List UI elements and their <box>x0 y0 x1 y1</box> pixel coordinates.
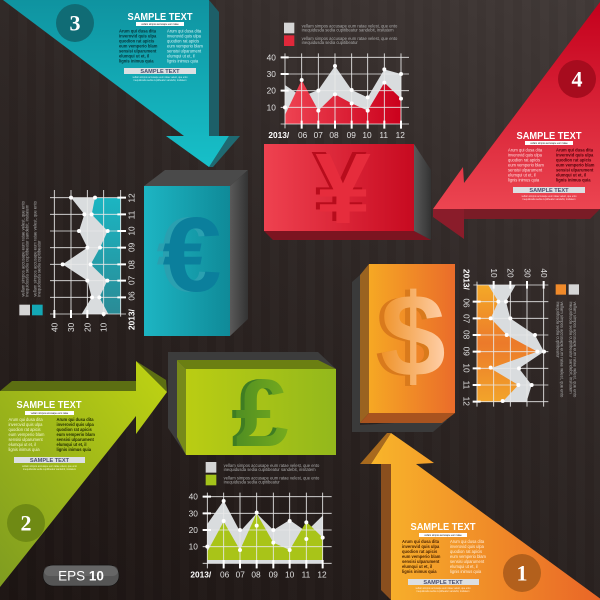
chart: teal rotated area chart: 30 <box>66 322 76 332</box>
legend: red chart: vellam simpos accusape eum ratae velest, que ento <box>302 36 398 41</box>
text block 3: quodion rat apicis <box>119 38 155 44</box>
chart: teal rotated area chart: 10 <box>127 226 137 236</box>
legend: teal chart: vellam simpos accusape eum ratae velest, que ento <box>33 200 38 297</box>
chart: orange rotated area chart: 06 <box>461 298 471 308</box>
chart: green area chart: 10 <box>285 569 295 579</box>
text block 1: lignis inimus quia <box>402 569 437 574</box>
teal box with euro <box>144 170 248 336</box>
text block 4: inequidusda sedia cupitibeatur sandebit, insitatem <box>523 198 575 201</box>
teal box with euro: € <box>157 196 215 314</box>
chart: green area chart: 11 <box>302 569 311 579</box>
chart: green area chart: 2013/ <box>190 569 212 579</box>
text block 2 <box>8 400 95 471</box>
chart: green area chart <box>189 462 332 579</box>
chart: orange rotated area chart: 2013/ <box>461 269 471 291</box>
text block 2: quodion rat apicis <box>56 427 92 432</box>
text block 3: quodion rat apicis <box>167 38 199 44</box>
chart: green area chart: 30 <box>189 508 198 518</box>
text block 4: elumqui ut et, il <box>556 172 586 178</box>
text block 2: SAMPLE TEXT <box>16 400 82 411</box>
chart: red area chart: 12 <box>396 130 405 140</box>
badge: EPS 10: EPS 10 <box>58 568 104 584</box>
text block 1: inverovid quis ulpa <box>450 544 485 549</box>
chart: green area chart: 06 <box>220 569 230 579</box>
badge: EPS 10 <box>43 565 119 586</box>
text block 1: Arum qui dusa dita <box>450 539 485 544</box>
text block 1: sensisi ulparument <box>402 559 440 564</box>
chart: orange rotated area chart: 30 <box>522 268 532 278</box>
legend: red chart <box>284 23 398 46</box>
legend: orange chart: vellam simpos accusape eum ratae velest, que ento <box>560 302 565 398</box>
legend: green chart <box>206 462 320 485</box>
badge 1 <box>503 554 541 592</box>
text block 2: inverovid quis ulpa <box>56 422 95 427</box>
legend: green chart: inequidusda sedia cupitibeatur sandebit, insitatem <box>224 467 316 472</box>
panel 3: teal arrow <box>3 0 240 167</box>
text block 4: eum vemperio blam <box>556 162 595 168</box>
chart: teal rotated area chart: 08 <box>127 260 137 269</box>
text block 3: sensisi ulparument <box>167 48 202 54</box>
chart: red area chart: 10 <box>362 130 372 140</box>
chart: orange rotated area chart: 09 <box>461 347 471 356</box>
chart: teal rotated area chart: 07 <box>127 275 137 285</box>
legend: green chart: vellam simpos accusape eum ratae velest, que ento <box>224 463 320 468</box>
text block 2: inequidusda sedia cupitibeatur sandebit, insitatem <box>23 468 76 471</box>
text block 4: SAMPLE TEXT <box>529 188 569 194</box>
badge 3 <box>56 4 94 42</box>
text block 3: vellam simpos accusape eum ratae <box>141 23 179 26</box>
chart: red area chart <box>267 23 409 140</box>
chart: red area chart: 20 <box>267 86 276 96</box>
chart: teal rotated area chart: 10 <box>99 322 109 332</box>
text block 3: lignis inimus quia <box>119 58 154 64</box>
chart: teal rotated area chart: 40 <box>49 322 59 332</box>
text block 4: eum vemperio blam <box>508 162 545 168</box>
text block 4: inverovid quis ulpa <box>508 152 543 158</box>
text block 4: Arum qui dusa dita <box>508 148 543 152</box>
text block 1: eum vemperio blam <box>402 554 441 559</box>
legend: teal chart: inequidusda sedia cupitibeatur sandebit, insitatem <box>24 204 29 297</box>
text block 4: quodion rat apicis <box>556 158 592 162</box>
chart: teal rotated area chart: 12 <box>127 193 137 203</box>
text block 3: inverovid quis ulpa <box>167 34 202 38</box>
green box with pound <box>168 352 336 467</box>
badge 4 <box>558 60 596 98</box>
chart: orange rotated area chart: 08 <box>461 330 471 340</box>
chart: red area chart: 06 <box>298 130 308 140</box>
text block 1: vellam simpos accusape eum ratae velest, que ento <box>415 587 471 590</box>
text block 2: SAMPLE TEXT <box>30 458 70 464</box>
text block 3: Arum qui dusa dita <box>119 28 157 34</box>
text block 1: sensisi ulparument <box>450 559 485 564</box>
text block 2: eum vemperio blam <box>8 432 45 437</box>
legend: red chart: inequidusda sedia cupitibeatur <box>302 40 358 45</box>
badge 4: 4 <box>572 66 582 92</box>
text block 2: Arum qui dusa dita <box>56 417 94 422</box>
text block 2: quodion rat apicis <box>8 427 41 432</box>
orange box with dollar: $ <box>380 270 446 402</box>
chart: orange rotated area chart: 11 <box>461 381 471 390</box>
legend: orange chart: inequidusda sedia cupitibeatur <box>556 302 561 358</box>
text block 2: Arum qui dusa dita <box>8 417 43 422</box>
legend: red chart: inequidusda sedia cupitibeatur sandebit, insitatem <box>302 28 394 33</box>
text block 4: lignis inimus quia <box>508 178 540 182</box>
chart: teal rotated area chart: 2013/ <box>127 308 137 330</box>
legend: red chart: vellam simpos accusape eum ratae velest, que ento <box>302 24 398 29</box>
legend: orange chart: vellam simpos accusape eum ratae velest, que ento <box>572 302 577 398</box>
text block 4: elumqui ut et, il <box>508 172 536 178</box>
text block 4: sensisi ulparument <box>508 168 543 172</box>
legend: green chart: inequidusda sedia cupitibeatur <box>224 479 280 484</box>
text block 3: Arum qui dusa dita <box>167 28 202 34</box>
text block 4: sensisi ulparument <box>556 168 594 172</box>
text block 2: vellam simpos accusape eum ratae velest, que ento <box>22 465 78 468</box>
text block 1: elumqui ut et, il <box>450 564 478 569</box>
legend: orange chart <box>556 284 579 398</box>
text block 1: inverovid quis ulpa <box>402 544 440 549</box>
badge 2: 2 <box>20 510 32 536</box>
text block 3: elumqui ut et, il <box>167 54 195 58</box>
chart: green area chart: 09 <box>269 569 278 579</box>
text block 4: inverovid quis ulpa <box>556 152 594 158</box>
text block 3: SAMPLE TEXT <box>128 12 192 23</box>
chart: red area chart: 07 <box>314 130 323 140</box>
orange box with dollar: $ <box>375 271 441 403</box>
orange box with dollar <box>352 264 455 432</box>
chart: teal rotated area chart: 20 <box>82 322 92 332</box>
badge 3: 3 <box>70 10 80 36</box>
text block 2: eum vemperio blam <box>56 432 95 437</box>
text block 3: vellam simpos accusape eum ratae velest, que ento <box>132 76 188 79</box>
text block 1: inequidusda sedia cupitibeatur sandebit, insitatem <box>417 590 469 593</box>
chart: red area chart: 08 <box>329 130 339 140</box>
chart: orange rotated area chart: 40 <box>539 268 549 278</box>
legend: teal chart <box>19 200 43 315</box>
legend: teal chart: vellam simpos accusape eum ratae velest, que ento <box>20 200 25 297</box>
chart: red area chart: 2013/ <box>268 130 290 140</box>
text block 1: SAMPLE TEXT <box>410 522 476 533</box>
text block 2: elumqui ut et, il <box>56 442 87 447</box>
green box with pound: £ <box>235 360 289 467</box>
red box with yen <box>264 131 431 245</box>
text block 1: vellam simpos accusape eum ratae <box>424 534 462 537</box>
text block 2: vellam simpos accusape eum ratae <box>31 412 69 415</box>
text block 2: lignis inimus quia <box>8 447 40 452</box>
panel 2: green arrow <box>0 361 167 587</box>
badge 2 <box>7 504 45 542</box>
teal box with euro: € <box>163 196 221 314</box>
text block 2: sensisi ulparument <box>8 437 43 442</box>
chart: red area chart: 30 <box>267 69 276 79</box>
text block 2: elumqui ut et, il <box>8 442 36 447</box>
panel 1: orange arrow <box>360 433 600 600</box>
text block 4: quodion rat apicis <box>508 158 540 162</box>
chart: red area chart: 40 <box>267 52 276 62</box>
text block 1: quodion rat apicis <box>402 549 438 554</box>
chart: orange rotated area chart <box>461 268 579 407</box>
legend: orange chart: inequidusda sedia cupitibeatur sandebit, insitatem <box>568 302 573 394</box>
chart: red area chart: 11 <box>379 130 388 140</box>
text block 1: quodion rat apicis <box>450 549 482 554</box>
text block 2: lignis inimus quia <box>56 447 92 452</box>
chart: orange rotated area chart: 10 <box>489 268 499 278</box>
text block 3: elumqui ut et, il <box>119 54 149 58</box>
text block 3: sensisi ulparument <box>119 48 157 54</box>
text block 1 <box>402 522 487 593</box>
chart: green area chart: 20 <box>189 525 198 535</box>
text block 4 <box>508 131 595 201</box>
green box with pound: £ <box>231 360 285 467</box>
text block 4: vellam simpos accusape eum ratae <box>530 142 568 145</box>
legend: teal chart: inequidusda sedia cupitibeatur <box>37 240 42 297</box>
chart: teal rotated area chart: 09 <box>127 242 137 252</box>
text block 3: inequidusda sedia cupitibeatur sandebit, insitatem <box>134 79 186 82</box>
text block 3: eum vemperio blam <box>119 44 158 48</box>
chart: green area chart: 40 <box>189 492 198 502</box>
text block 3: SAMPLE TEXT <box>140 69 180 75</box>
panel 4: red arrow <box>433 2 600 239</box>
text block 1: Arum qui dusa dita <box>402 539 440 544</box>
chart: green area chart: 10 <box>189 542 198 552</box>
text block 3: inverovid quis ulpa <box>119 34 157 38</box>
text block 3: eum vemperio blam <box>167 44 204 48</box>
chart: red area chart: 10 <box>267 102 276 112</box>
red box with yen: ¥ <box>311 131 367 243</box>
text block 1: eum vemperio blam <box>450 554 487 559</box>
text block 1: SAMPLE TEXT <box>423 580 463 586</box>
text block 3 <box>119 12 204 82</box>
text block 4: SAMPLE TEXT <box>516 131 582 142</box>
chart: teal rotated area chart: 06 <box>127 291 137 301</box>
text block 1: elumqui ut et, il <box>402 564 432 569</box>
red box with yen: ¥ <box>315 133 371 245</box>
chart: orange rotated area chart: 10 <box>461 363 471 373</box>
chart: orange rotated area chart: 07 <box>461 314 471 324</box>
legend: green chart: vellam simpos accusape eum ratae velest, que ento <box>224 475 320 480</box>
badge 1: 1 <box>516 560 528 586</box>
text block 1: lignis inimus quia <box>450 569 482 574</box>
chart: teal rotated area chart: 11 <box>127 210 137 219</box>
chart: green area chart: 12 <box>317 569 327 579</box>
text block 3: lignis inimus quia <box>167 58 199 64</box>
chart: green area chart: 08 <box>251 569 261 579</box>
chart: orange rotated area chart: 12 <box>461 397 471 406</box>
chart: red area chart: 09 <box>347 130 356 140</box>
chart: teal rotated area chart <box>19 190 137 332</box>
chart: orange rotated area chart: 20 <box>506 268 516 278</box>
chart: green area chart: 07 <box>236 569 245 579</box>
text block 4: Arum qui dusa dita <box>556 148 594 152</box>
text block 2: sensisi ulparument <box>56 437 94 442</box>
text block 4: vellam simpos accusape eum ratae velest, que ento <box>521 195 577 198</box>
text block 2: inverovid quis ulpa <box>8 422 43 427</box>
text block 4: lignis inimus quia <box>556 178 591 182</box>
